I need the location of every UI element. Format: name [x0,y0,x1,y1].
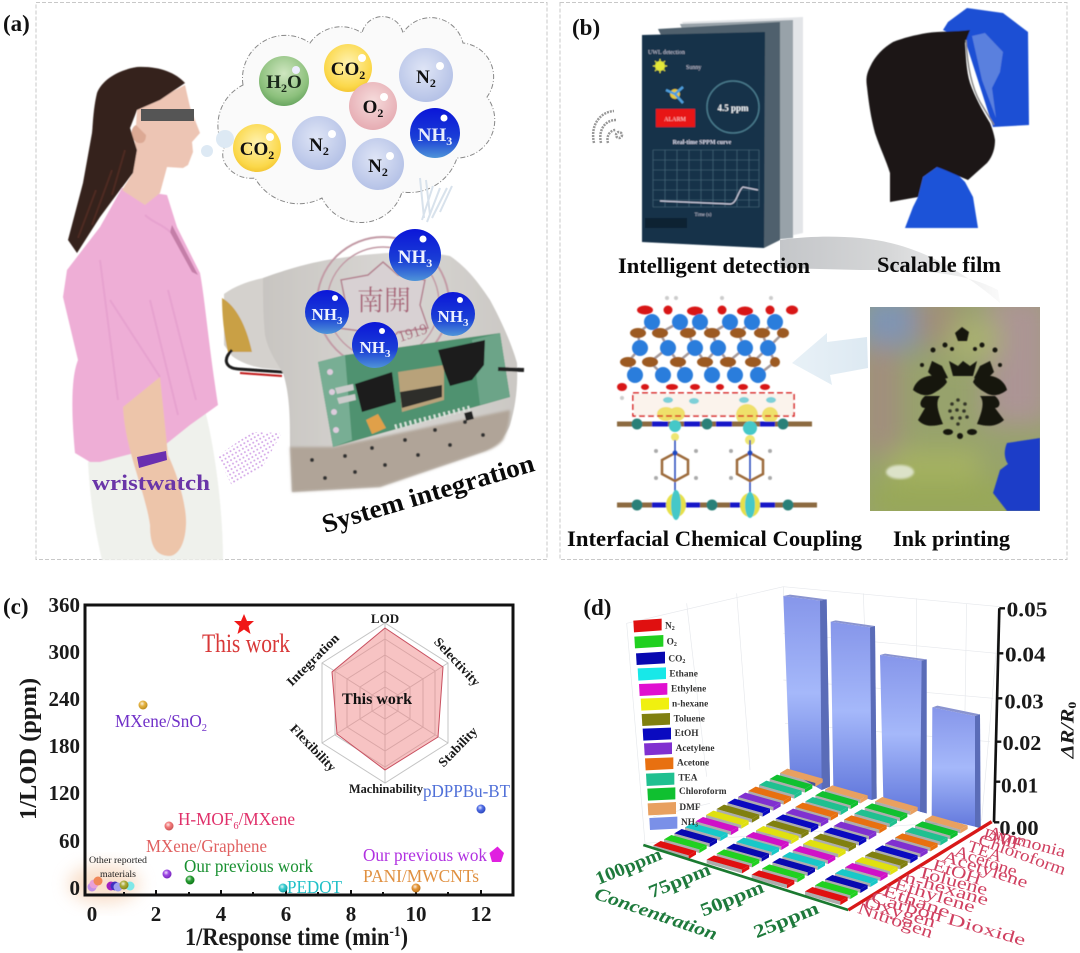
label (a): (a) [3,11,30,36]
gas axis labels: Chloroform [976,830,1069,879]
wifi icon [593,111,622,143]
radar labels: Integration [283,630,343,689]
response axis title: 0 [1065,702,1079,709]
legend: Acetylene [676,744,715,754]
concentration tick labels [592,844,822,943]
gas molecules: CO [331,59,359,80]
y axis tick labels: 0 [70,876,80,900]
NH3 molecules on device: NH [398,247,426,268]
magenta pentagon point [490,846,504,862]
system integration label: System integration [318,448,538,539]
gas molecules: O [363,97,377,118]
x axis tick labels [87,902,492,926]
person figure [63,67,223,560]
legend: 2 [674,642,677,648]
x axis tick labels: 0 [87,902,97,926]
NH3 molecules on device: 3 [385,348,391,360]
ink pattern [913,327,1007,439]
wristwatch label: wristwatch [92,470,210,495]
curved arrow [780,237,1000,303]
y axis tick labels: 300 [48,640,80,664]
data labels: MXene/SnO [115,711,206,731]
data labels: Our previous work [184,856,313,876]
concentration tick labels: 50ppm [697,877,768,921]
radar center label: This work [342,691,412,708]
concentration tick labels: 75ppm [646,859,714,903]
gas axis labels: Ammonia [986,822,1069,861]
response tick labels: 0.03 [1004,689,1044,713]
response tick labels: 0.01 [1001,773,1038,797]
radar inset [283,611,484,796]
NH3 bars [783,595,981,828]
gas axis labels: Ethylene [892,874,977,917]
gas molecules: N [368,156,382,177]
phone app screens: Time (s) [695,213,712,218]
panel b: film and printing workflow [560,2,1067,560]
data labels: materials [100,869,137,879]
gas molecules: 2 [359,68,365,82]
gas molecules: 2 [377,106,383,120]
gas axis labels: EtOH [930,855,984,889]
legend: 2 [672,626,675,632]
gas molecules: 2 [281,81,287,95]
data labels: 6 [233,820,239,832]
legend [633,619,727,830]
legend: Ethane [669,670,698,680]
wearable device [222,237,524,492]
legend: NH [681,818,695,828]
x axis tick labels: 6 [281,902,291,926]
NH3 molecules on device: 3 [426,256,432,270]
gas molecules [233,44,460,190]
gas axis labels [855,822,1069,950]
wearable device: 南開 [357,285,411,317]
radar labels: Machinability [349,781,423,796]
intelligent detection label: Intelligent detection [618,253,810,278]
NH3 molecules on device: NH [360,338,385,357]
glow behind other reported materials [68,864,140,904]
x axis title: 1/Response time (min [185,924,414,951]
data labels: pDPPBu-BT [423,781,510,801]
chart walls [627,587,1000,843]
concentration tick labels: 100ppm [592,844,666,890]
ink printing photo [870,307,1040,511]
gas axis labels: Ethane [880,881,953,922]
gas axis labels: n-hexane [902,867,991,909]
gas molecules: H [266,72,281,93]
plot frame [85,605,513,895]
NH3 molecules on device [305,229,475,368]
legend: 3 [695,823,698,829]
y axis tick labels: 360 [48,593,80,617]
radar value polygon [332,628,443,770]
scalable film label: Scalable film [877,252,1001,277]
floor axes [643,845,848,910]
gas cloud [218,17,495,223]
gas molecules: O [287,72,302,93]
response tick labels: 0.00 [999,816,1039,840]
x axis title: -1 [389,924,401,940]
gas molecules: N [309,135,323,156]
response axis [994,608,1005,822]
radar labels: Stability [435,723,481,770]
data labels: Other reported [89,855,148,865]
concentration tick labels: 25ppm [751,898,822,943]
gas molecules: CO [240,139,268,160]
gas axis labels: Carbon Dioxide [869,887,1028,950]
phone app screens: Real-time SPPM curve [673,140,732,146]
data labels: /MXene [239,809,295,829]
legend: n-hexane [672,699,708,709]
legend: Acetone [677,759,709,769]
label (b): (b) [572,15,600,40]
phone app screens: UWL detection [648,50,685,56]
gas axis labels: Nitrogen [855,898,936,942]
panel d: 3D bar chart of gas response [583,587,1079,950]
x axis tick labels: 4 [216,902,227,926]
data labels: This work [202,629,290,658]
x axis tick labels: 12 [470,902,492,926]
legend: CO [668,654,682,664]
y axis tick labels: 60 [59,829,80,853]
NH3 molecules on device: NH [438,307,463,326]
interfacial molecular structure [617,296,817,520]
gas molecules: NH [418,125,446,146]
gas molecules: N [416,67,430,88]
gas bars rows [653,769,968,905]
x axis title: ) [401,924,408,951]
radar labels: LOD [371,611,399,626]
data points [88,700,486,892]
wristwatch band [137,451,167,468]
data labels: MXene/Graphene [146,836,267,856]
legend: Toluene [674,714,705,724]
legend: Ethylene [671,684,706,694]
panel c: scatter chart of 1/LOD versus 1/response time [3,593,513,951]
hatch signal [420,178,452,222]
legend: 2 [682,659,685,665]
gas axis labels: Toluene [916,862,990,899]
gas molecules: 2 [382,165,388,179]
legend: EtOH [675,729,699,739]
legend: DMF [679,803,701,813]
y axis title: 1/LOD (ppm) [16,678,42,820]
gas axis labels: TEA [965,836,1005,866]
gas axis labels: Acetylene [940,846,1030,892]
legend: TEA [678,774,698,784]
radar labels: Selectivity [431,634,484,689]
phone app screens [642,17,803,248]
panel a: system integration [3,2,547,560]
legend: O [667,637,674,647]
halftone dots [217,432,282,486]
phone app screens: 4.5 ppm [717,103,749,113]
NH3 molecules on device: 3 [463,317,469,329]
radar labels [283,611,484,796]
response tick labels: 0.05 [1007,598,1047,622]
x axis tick labels: 2 [151,902,161,926]
data labels: H-MOF [178,809,236,829]
label (d): (d) [583,595,611,620]
data labels: 2 [202,722,207,734]
gas molecules: 2 [430,76,436,90]
gas molecules: 3 [446,134,452,148]
data labels: PEDOT [287,877,342,897]
response tick labels [999,598,1047,840]
x axis tick labels: 8 [346,902,356,926]
gas axis labels: Oxygen [862,893,939,932]
ink printing label: Ink printing [893,526,1010,551]
data labels [89,629,510,897]
gas molecules: 2 [268,148,274,162]
phone app screens: Sunny [686,65,701,71]
red star point [234,614,254,634]
NH3 molecules on device: NH [312,305,337,324]
wearable device: 1919 [396,321,430,346]
light blue arrow [792,333,868,385]
response tick labels: 0.04 [1005,643,1046,667]
y axis tick labels: 120 [48,781,80,805]
y axis tick labels: 240 [48,687,80,711]
legend: N [665,621,672,631]
data labels: PANI/MWCNTs [363,866,479,886]
response tick labels: 0.02 [1003,731,1041,755]
y axis tick labels: 180 [48,734,80,758]
scalable film photo [866,8,1029,228]
gas molecules: 2 [323,144,329,158]
y axis tick labels [48,593,80,900]
gas axis labels: Acetone [952,841,1020,881]
phone app screens: ALARM [664,117,686,123]
data labels: Our previous wok [363,845,487,865]
label (c): (c) [3,594,29,619]
x axis tick labels: 10 [406,902,426,926]
breath bubbles [201,130,234,157]
gas axis labels: DMF [981,824,1025,854]
response axis title: ΔR/R [1057,715,1078,758]
legend: Chloroform [679,787,727,797]
interfacial chemical coupling label: Interfacial Chemical Coupling [567,526,862,551]
eye bar [141,109,194,121]
radar labels: Flexibility [287,721,340,775]
concentration axis title: Concentration [592,883,720,944]
NH3 molecules on device: 3 [337,315,343,327]
